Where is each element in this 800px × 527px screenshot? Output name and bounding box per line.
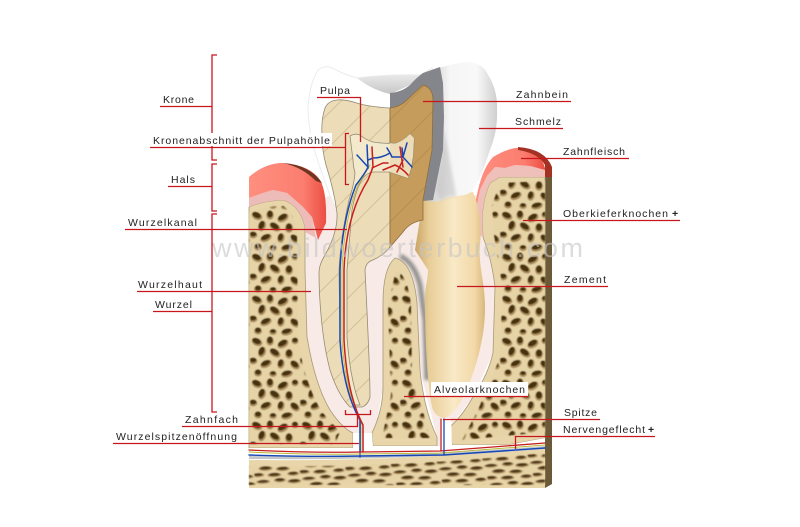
pulp chamber [339,134,414,405]
label: Zahnfach: Zahnfach [185,414,238,426]
lower bone pores [249,453,545,485]
right tooth crown [430,62,497,202]
label: Pulpa [317,85,360,142]
nerve channel [249,418,545,459]
left dentine [319,100,390,407]
lower bone [249,447,545,488]
label: Alveolarknochen [404,382,528,396]
left bone [249,200,353,448]
label: Hals [168,174,212,186]
label: Zahnbein: Zahnbein [516,89,568,101]
label: Hals: Hals [171,174,195,186]
right gum [473,148,545,238]
pulp fill right [390,134,414,178]
label: Schmelz [479,116,563,128]
crown shade [436,130,456,201]
label: Wurzelspitzenöffnung: Wurzelspitzenöffnung [116,431,237,443]
watermark: www.bildwoerterbuch.com [211,233,583,263]
label: Wurzel [153,299,212,312]
label: Spitze: Spitze [564,407,597,419]
right bone pores [462,181,545,440]
enamel cut section [390,67,444,201]
label: Alveolarknochen: Alveolarknochen [434,384,525,396]
right bone [450,177,545,445]
label: Oberkieferknochen + [523,208,680,220]
left bone membrane [249,190,316,238]
label: Nervengeflecht +: + [648,424,654,436]
label: Wurzelkanal: Wurzelkanal [128,217,197,229]
label: Wurzel: Wurzel [155,299,192,311]
left bone pores [249,206,340,444]
crown chewing surface [357,68,432,94]
illustration: tooth cross-section [249,62,552,488]
blood vessels and nerve [249,143,545,457]
middle bone pores [382,270,430,438]
right tooth root [415,192,485,418]
right gum rim [518,147,552,177]
jaw side face [545,172,552,488]
label: Zement: Zement [564,274,606,286]
label: Krone: Krone [163,94,194,106]
label: Kronenabschnitt der Pulpahöhle: Kronenabschnitt der Pulpahöhle [153,135,330,147]
label: Krone [160,94,212,106]
bracket: Krone [212,55,217,160]
label: Kronenabschnitt der Pulpahöhle [150,133,349,184]
label: Zahnfach [182,410,370,426]
periodontal ligament [300,195,495,449]
left gum rim [283,163,322,183]
label: Nervengeflecht +: Nervengeflecht [563,424,645,436]
left gum [249,163,326,240]
arch shadow [400,256,427,380]
label: Oberkieferknochen +: Oberkieferknochen [563,208,668,220]
left crown enamel [308,67,432,205]
label: Zahnfleisch: Zahnfleisch [563,146,625,158]
label: Oberkieferknochen +: + [672,208,678,220]
middle bone [372,258,437,446]
right membrane [476,165,545,237]
label: Zahnfleisch [521,146,629,158]
label: Pulpa: Pulpa [320,85,350,97]
bracket: Wurzel [212,214,217,412]
label: Schmelz: Schmelz [515,116,561,128]
right dentine [390,85,433,247]
label: Wurzelhaut: Wurzelhaut [138,279,202,291]
label: Nervengeflecht + [516,424,655,449]
bracket: Hals [212,164,217,211]
